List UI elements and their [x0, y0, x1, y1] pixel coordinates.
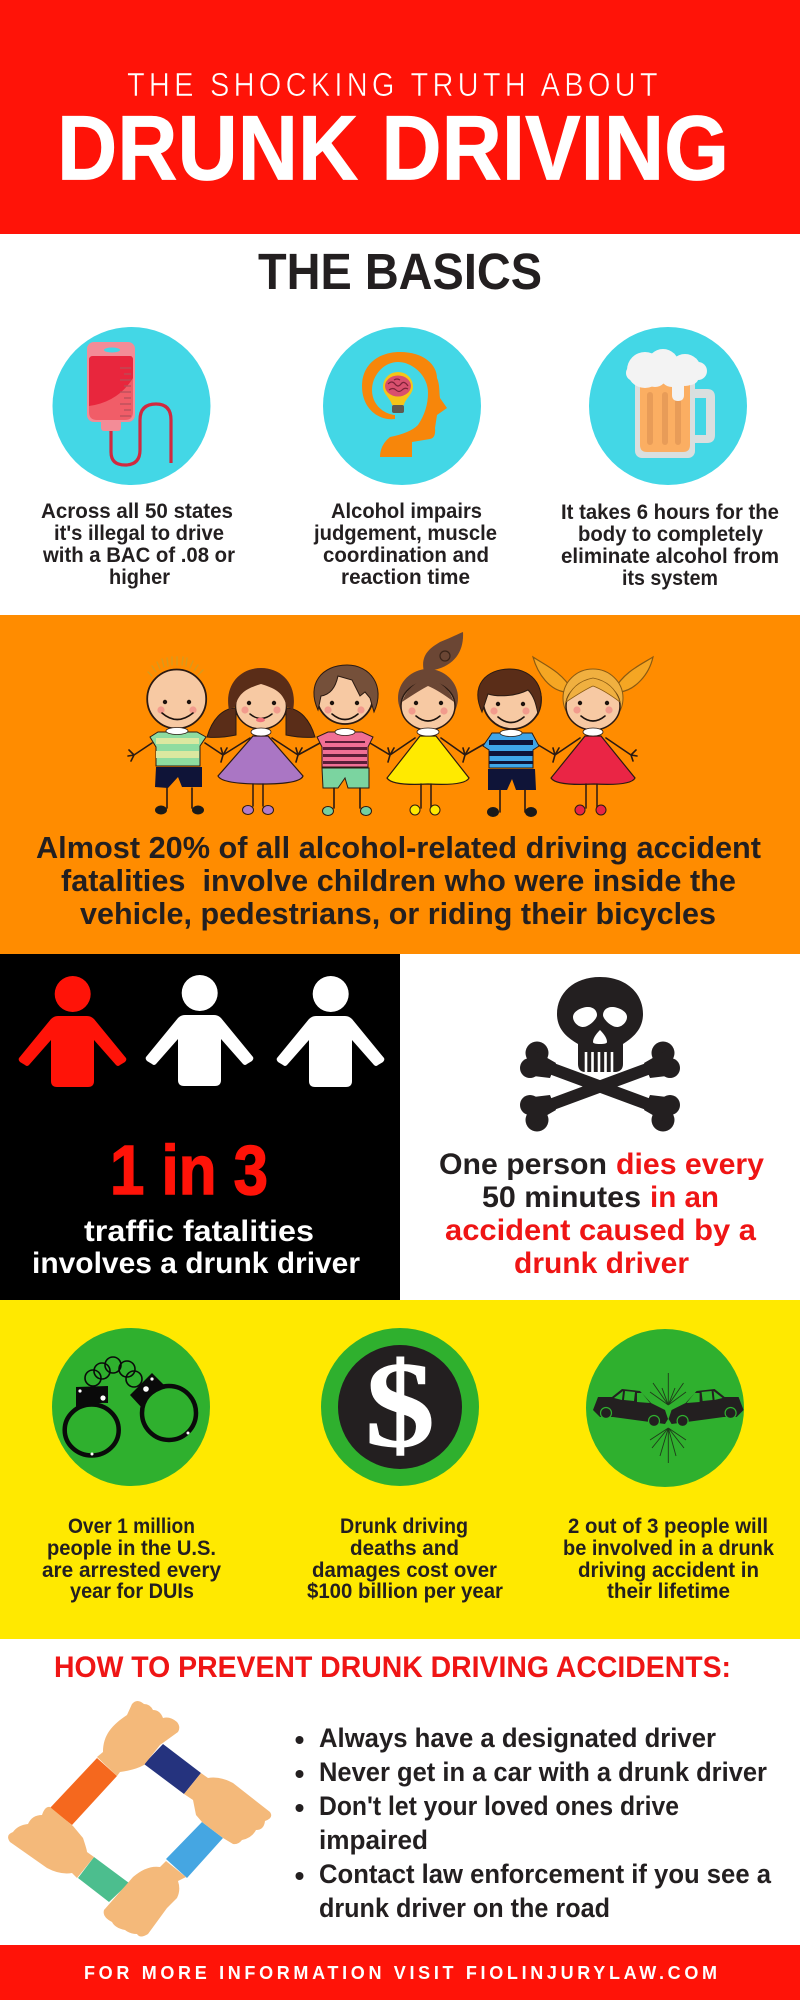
icon: car crash	[586, 1329, 744, 1487]
text: elimination time: its system	[622, 566, 718, 590]
child 1: boy green shirt	[147, 657, 206, 814]
text: one person dies: One person	[439, 1148, 607, 1181]
bulleted list: Contact law enforcement if you see a	[319, 1859, 772, 1889]
text: two out of three: be involved in a drunk	[563, 1536, 774, 1560]
stat: 1 in 3: 1 in 3	[110, 1131, 268, 1209]
bulleted list: Never get in a car with a drunk driver	[319, 1757, 767, 1787]
icon: four linked hands	[8, 1701, 271, 1936]
text: one person dies: accident caused by a	[445, 1214, 756, 1247]
illustration: six children holding hands	[128, 632, 653, 817]
text: one person dies: drunk driver	[514, 1247, 689, 1280]
panel: header	[0, 0, 800, 234]
arms and linked hands	[128, 738, 637, 762]
text: two out of three: their lifetime	[607, 1579, 730, 1603]
text: cost: damages cost over	[312, 1558, 498, 1582]
text: cost: Drunk driving	[340, 1514, 468, 1538]
text: traffic fatalities	[32, 1215, 360, 1280]
text: 20% of fatalities	[36, 830, 761, 931]
text: BAC limit: it's illegal to drive	[54, 521, 224, 545]
child 6: girl red dress	[533, 657, 653, 815]
text: elimination time: body to completely	[578, 522, 763, 546]
icon: red person	[19, 976, 126, 1087]
text: one person dies: 50 minutes	[482, 1181, 641, 1214]
icon: white person	[146, 975, 253, 1086]
heading: the basics: THE BASICS	[258, 243, 542, 300]
text: impairment: coordination and	[323, 543, 489, 567]
text: two out of three	[563, 1514, 774, 1603]
text: footer link: FOR MORE INFORMATION VISIT FIOLINJURYLAW.COM	[84, 1963, 717, 1983]
text: arrests: year for DUIs	[70, 1579, 194, 1603]
text: BAC limit: Across all 50 states	[41, 499, 233, 523]
icon: beer mug	[589, 327, 747, 485]
text: impairment: Alcohol impairs	[331, 499, 482, 523]
text: traffic fatalities: involves a drunk driver	[32, 1247, 360, 1280]
text: elimination time: It takes 6 hours for the	[561, 500, 779, 524]
bulleted list: drunk driver on the road	[319, 1893, 610, 1923]
text: elimination time	[561, 500, 779, 590]
text: cost: $100 billion per year	[307, 1579, 504, 1603]
text: BAC limit: with a BAC of .08 or	[42, 543, 236, 567]
panel: the basics	[41, 243, 779, 590]
child 5: boy blue shirt	[478, 669, 541, 817]
child 2: girl purple dress	[207, 668, 315, 814]
text: impairment: judgement, muscle	[313, 521, 497, 545]
title: main: DRUNK DRIVING	[57, 98, 729, 200]
text: one person dies	[439, 1148, 764, 1280]
text: BAC limit: higher	[109, 565, 171, 589]
panel: 1 in 3	[0, 954, 400, 1300]
panel: consequences	[0, 1300, 800, 1639]
text: cost: deaths and	[350, 1536, 459, 1560]
text: 20% of fatalities: Almost 20% of all alcohol-related driving accident	[36, 830, 761, 865]
bulleted list: Always have a designated driver	[319, 1723, 716, 1753]
text: one person dies: dies every	[616, 1148, 764, 1181]
text: arrests: are arrested every	[42, 1558, 221, 1582]
panel: prevention	[8, 1651, 772, 1936]
icon: blood bag	[52, 327, 210, 485]
text: two out of three: 2 out of 3 people will	[568, 1514, 768, 1538]
icon: handcuffs	[52, 1328, 210, 1486]
heading: how to prevent: HOW TO PREVENT DRUNK DRIVING ACCIDENTS:	[54, 1651, 731, 1684]
bulleted list: Don't let your loved ones drive	[319, 1791, 679, 1821]
panel: skull statistic	[439, 977, 764, 1280]
bulleted list: impaired	[319, 1825, 428, 1855]
icon: skull and crossbones	[520, 977, 680, 1132]
child 3: boy pink shirt	[314, 665, 378, 816]
text: two out of three: driving accident in	[578, 1558, 759, 1582]
icon: dollar sign: $	[365, 1336, 435, 1473]
title: kicker: THE SHOCKING TRUTH ABOUT	[127, 66, 658, 103]
child 4: girl yellow dress	[387, 632, 469, 815]
text: elimination time: eliminate alcohol from	[561, 544, 779, 568]
text: arrests: people in the U.S.	[47, 1536, 216, 1560]
text: cost	[307, 1514, 504, 1603]
text: arrests	[42, 1514, 221, 1603]
text: impairment: reaction time	[341, 565, 470, 589]
text: 20% of fatalities: vehicle, pedestrians, or riding their bicycles	[80, 896, 716, 931]
panel: children statistic	[0, 615, 800, 954]
text: traffic fatalities: traffic fatalities	[84, 1215, 314, 1248]
panel: footer	[0, 1945, 800, 2000]
text: one person dies: in an	[650, 1181, 719, 1214]
icon: dollar sign	[321, 1328, 479, 1486]
text: BAC limit	[41, 499, 236, 589]
text: 20% of fatalities: fatalities involve children who were inside the	[61, 863, 736, 898]
text: arrests: Over 1 million	[68, 1514, 195, 1538]
icon: head with brain bulb	[323, 327, 481, 485]
text: impairment	[313, 499, 497, 589]
icon: white person	[277, 976, 384, 1087]
bulleted list	[296, 1723, 772, 1923]
